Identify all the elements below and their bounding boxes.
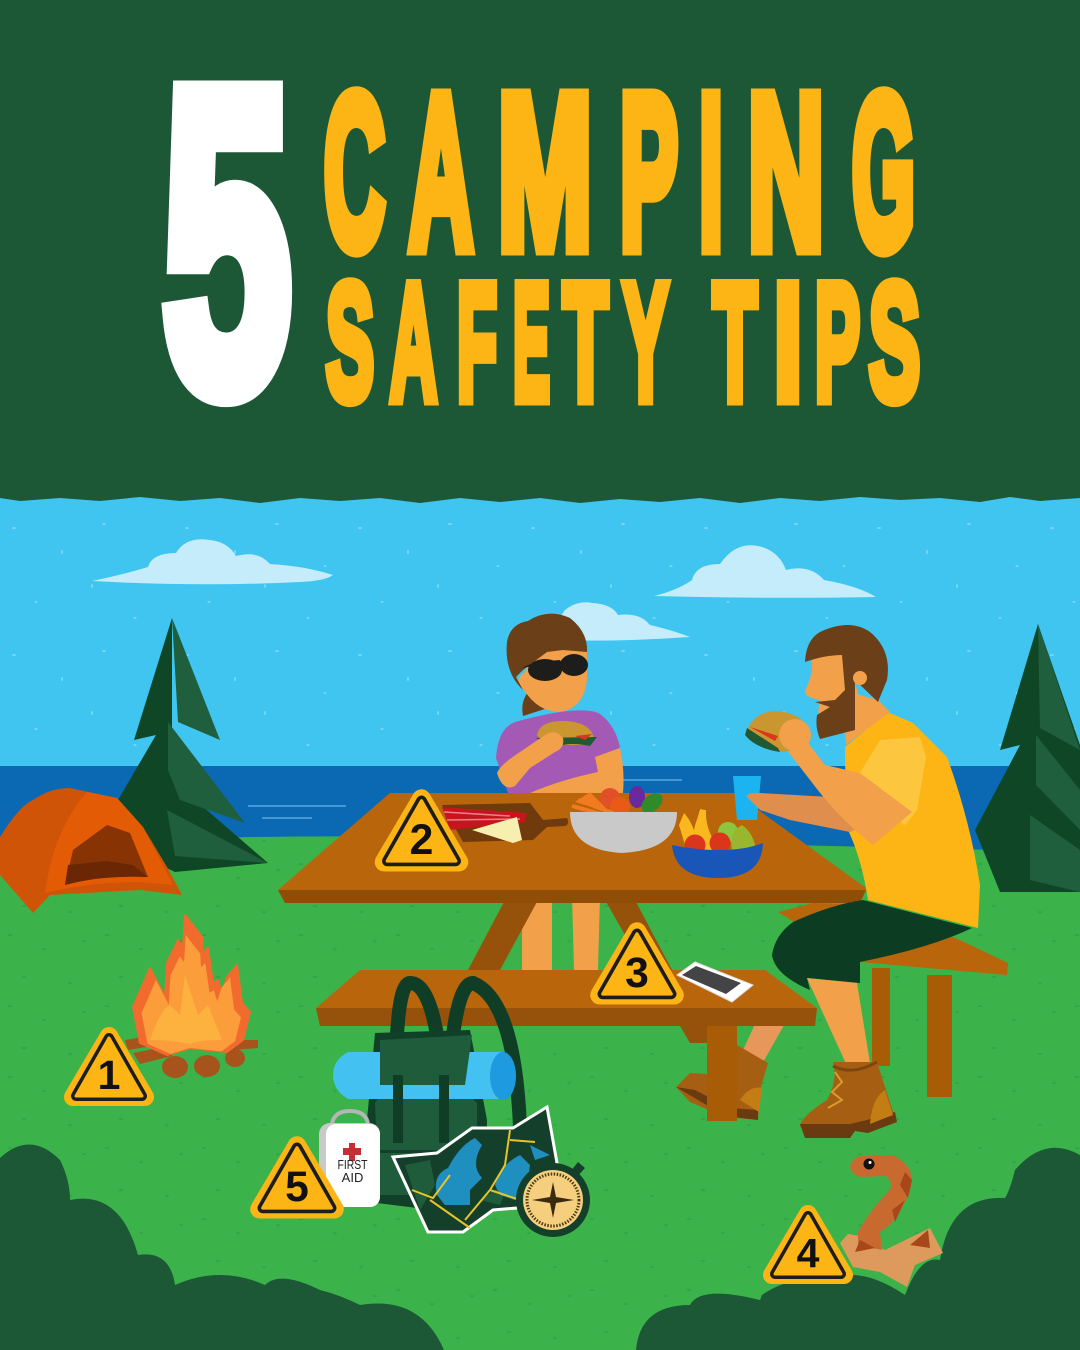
lower pocket bbox=[375, 1092, 477, 1195]
first aid kit bbox=[319, 1111, 380, 1207]
tree right bbox=[975, 624, 1080, 892]
campfire bbox=[125, 915, 258, 1078]
title line 2: T bbox=[713, 250, 757, 434]
warning badge 2: 2 bbox=[410, 816, 433, 864]
first aid kit: AID bbox=[342, 1170, 363, 1185]
body bbox=[367, 1030, 487, 1208]
title line 2: T bbox=[563, 250, 608, 434]
title line 2: I bbox=[774, 250, 802, 434]
ponytail bbox=[522, 690, 548, 716]
man bbox=[745, 625, 980, 1138]
cloud right bbox=[654, 545, 876, 598]
arms bbox=[530, 748, 624, 793]
title bbox=[163, 2, 920, 480]
title line 1: M bbox=[498, 51, 592, 294]
backpack bbox=[333, 983, 520, 1208]
fruit bowl bbox=[672, 810, 763, 878]
cloud middle bbox=[550, 602, 690, 641]
sea bbox=[0, 766, 1080, 858]
text: G bbox=[852, 51, 915, 294]
shirt bbox=[845, 712, 980, 928]
cloud left bbox=[92, 539, 333, 584]
near boot bbox=[800, 1062, 897, 1138]
forearm bbox=[747, 793, 880, 832]
fist bbox=[779, 719, 811, 751]
flames bbox=[133, 915, 250, 1055]
map bbox=[393, 1107, 557, 1232]
burger bbox=[745, 711, 810, 752]
lid bbox=[380, 1035, 472, 1085]
warning badge 5: 5 bbox=[285, 1163, 309, 1211]
numeral 5: 5 bbox=[163, 2, 291, 480]
smartphone bbox=[677, 962, 753, 1002]
straps bbox=[397, 983, 520, 1128]
front bench bbox=[316, 970, 817, 1121]
warning badge 1: 1 bbox=[98, 1052, 120, 1098]
right bench bbox=[778, 903, 1008, 1097]
hair and beard bbox=[805, 625, 888, 739]
bushes right bbox=[636, 1148, 1080, 1350]
burger bbox=[535, 721, 597, 746]
face bbox=[805, 650, 860, 720]
salad bowl bbox=[570, 786, 677, 853]
title line 2: S bbox=[326, 250, 374, 434]
buckles bbox=[393, 1075, 449, 1143]
sunglasses bbox=[522, 654, 588, 681]
warning badge 4: 4 bbox=[797, 1230, 820, 1276]
title line 2: A bbox=[390, 250, 437, 434]
face bbox=[518, 640, 587, 712]
snake bbox=[840, 1155, 943, 1287]
sleeve bbox=[860, 737, 926, 825]
bushes left bbox=[0, 1144, 444, 1350]
first aid kit: FIRST bbox=[338, 1157, 368, 1172]
warning badge 2 bbox=[384, 799, 459, 864]
near leg bbox=[807, 978, 870, 1066]
warning badge 5 bbox=[260, 1146, 334, 1211]
sky background bbox=[0, 490, 1080, 780]
title line 1: A bbox=[409, 51, 473, 294]
warning badge 3: 3 bbox=[625, 949, 649, 997]
hair bbox=[507, 614, 587, 690]
title line 1: I bbox=[699, 51, 723, 294]
header band bbox=[0, 0, 1080, 503]
woman bbox=[496, 614, 624, 970]
tree left bbox=[118, 618, 268, 872]
warning badge 4 bbox=[772, 1214, 844, 1276]
man far leg and boot bbox=[676, 1020, 787, 1120]
picnic table bbox=[278, 793, 866, 970]
title line 2: Y bbox=[623, 250, 667, 434]
shorts bbox=[772, 900, 972, 990]
grass bbox=[0, 836, 1080, 1350]
title line 2: F bbox=[457, 250, 497, 434]
title line 2: E bbox=[513, 250, 550, 434]
shirt bbox=[496, 710, 620, 793]
ear bbox=[853, 671, 867, 685]
compass bbox=[516, 1162, 590, 1237]
table legs bbox=[468, 900, 672, 970]
table top bbox=[278, 793, 866, 903]
title line 2: P bbox=[815, 250, 860, 434]
logs bbox=[125, 1036, 258, 1078]
food board bbox=[442, 803, 568, 843]
text: S bbox=[869, 250, 920, 434]
warning badge 1 bbox=[73, 1036, 145, 1098]
upper arm bbox=[783, 743, 912, 845]
warning badge 3 bbox=[600, 932, 674, 997]
title line 1: N bbox=[748, 51, 824, 294]
legs bbox=[522, 895, 600, 970]
tent bbox=[0, 788, 182, 913]
neck bbox=[842, 690, 890, 745]
cup bbox=[733, 776, 761, 820]
title line 1: P bbox=[620, 51, 678, 294]
sleeping mat bbox=[333, 1052, 516, 1100]
title line 1: C bbox=[324, 51, 385, 294]
